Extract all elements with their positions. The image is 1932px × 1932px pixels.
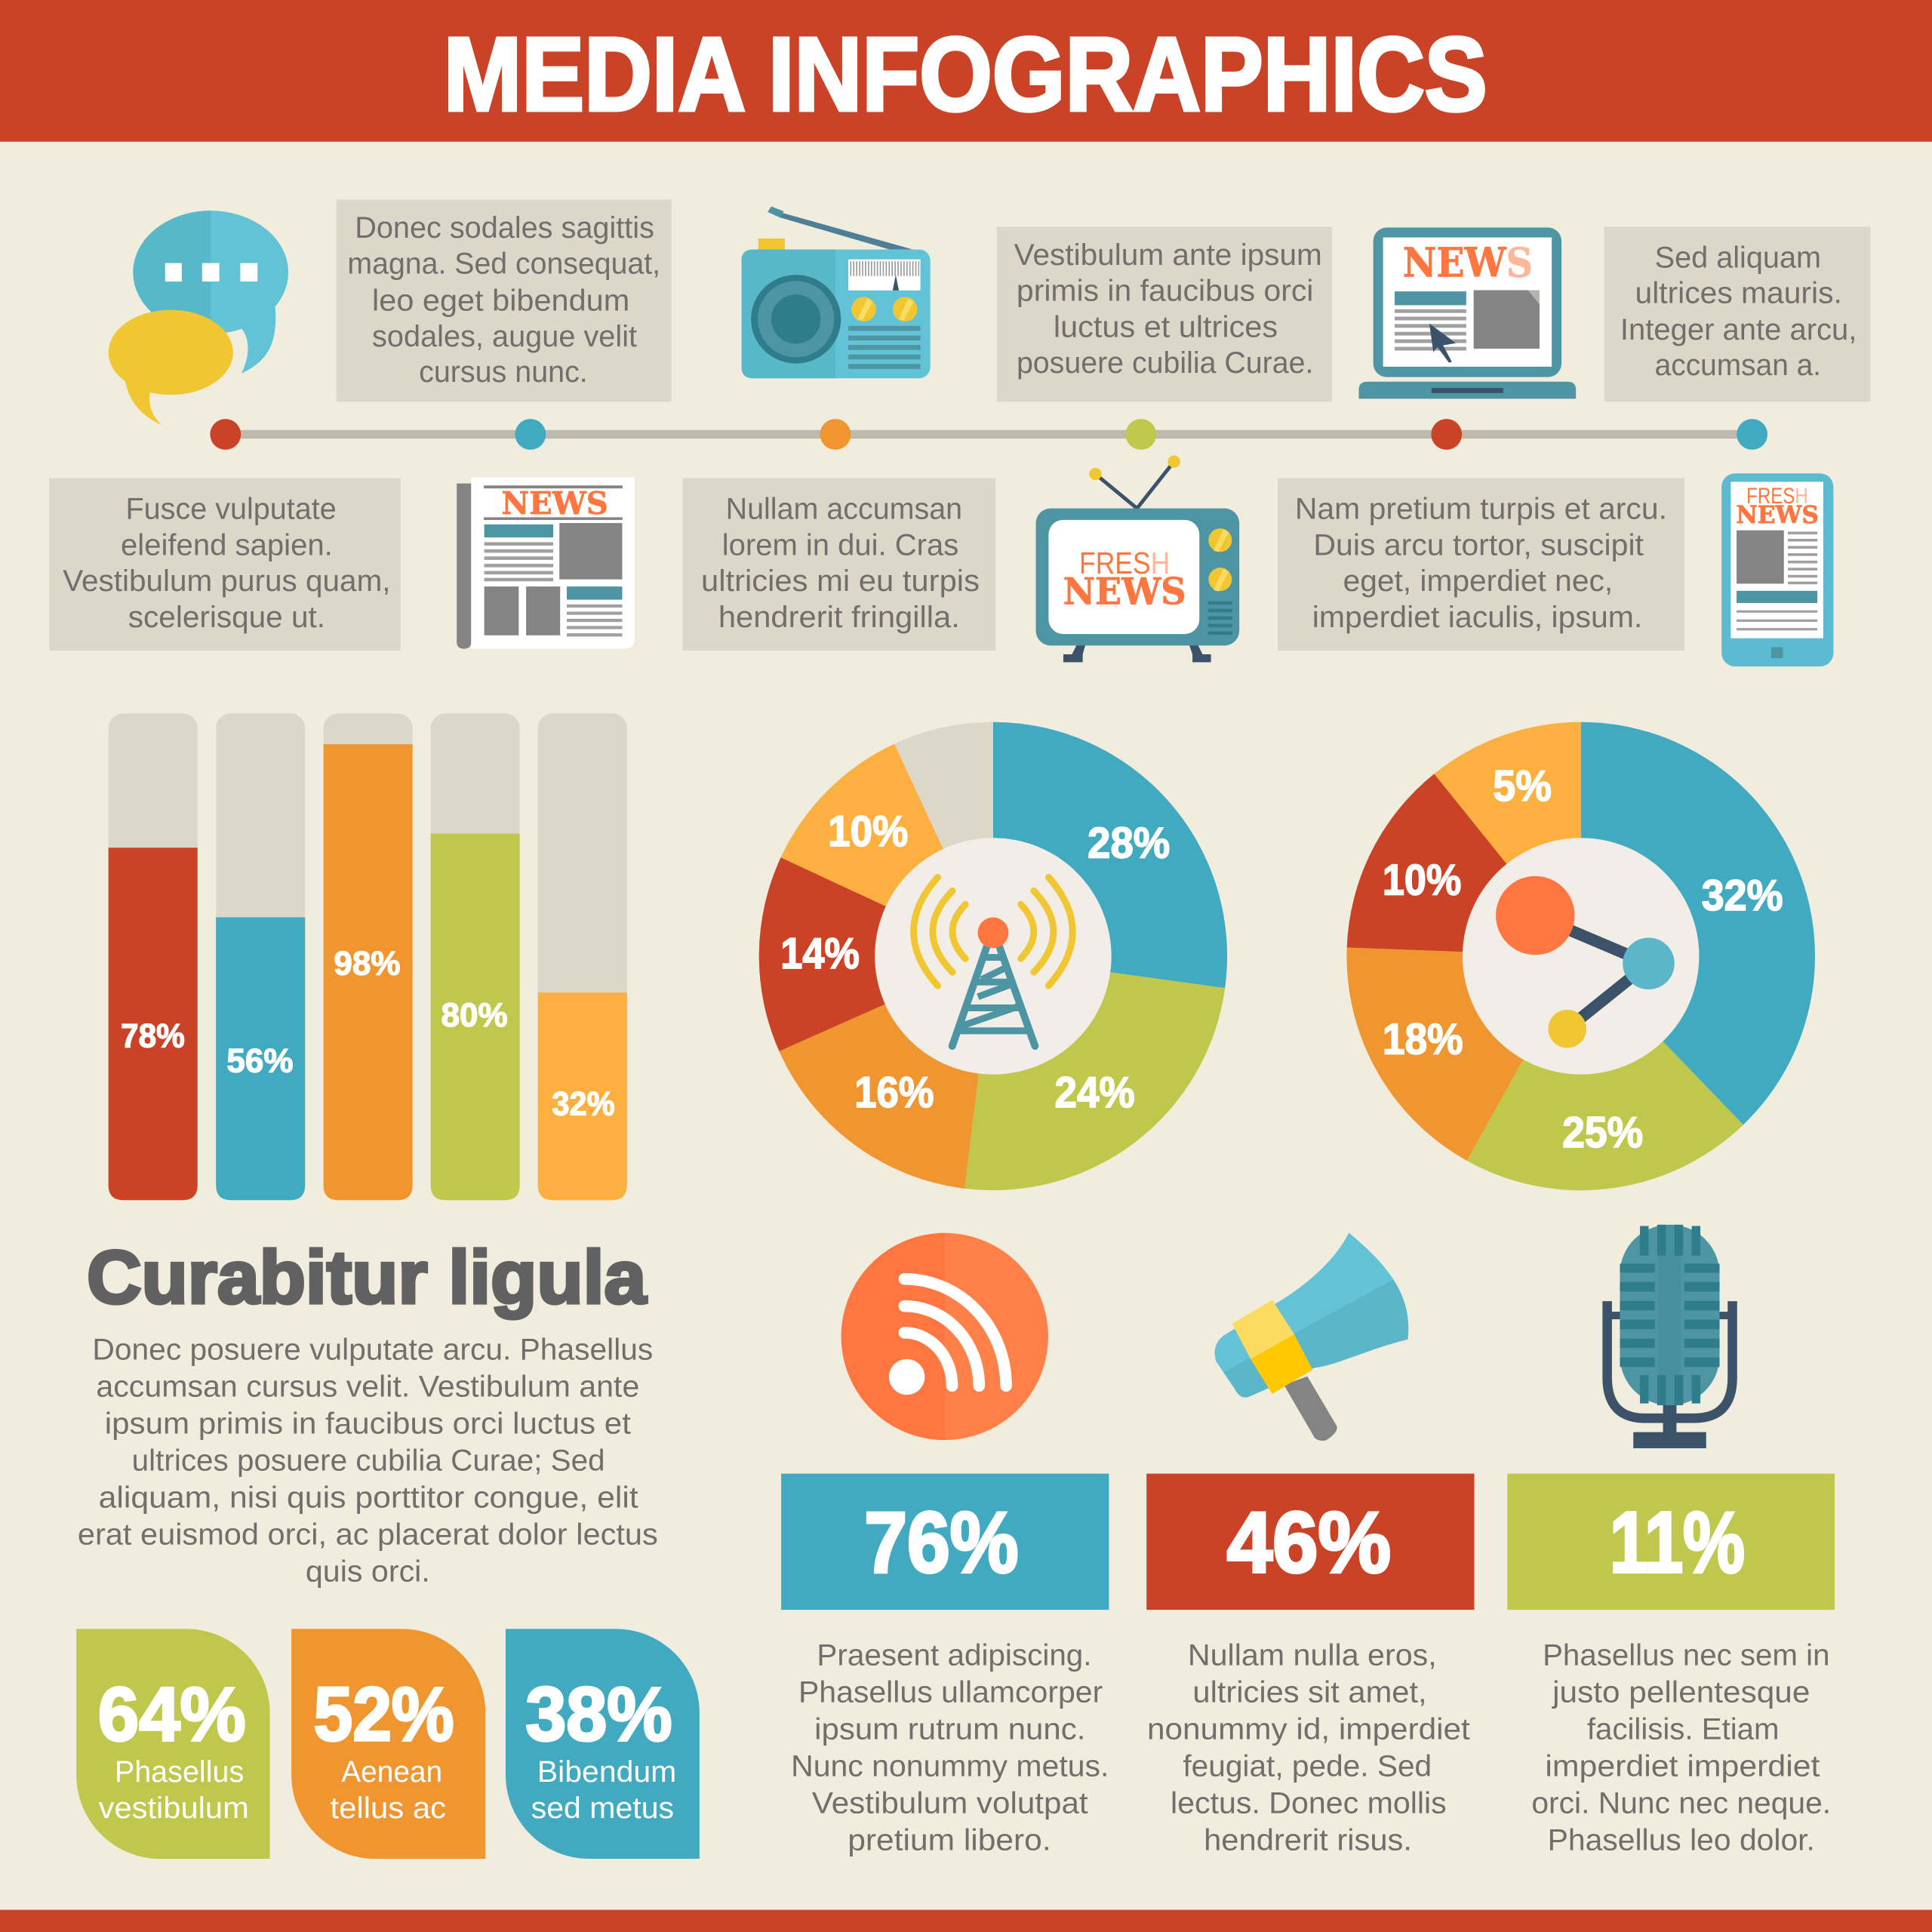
heading: Curabitur ligula: Curabitur ligula xyxy=(87,1236,648,1320)
text column 3: facilisis. Etiam xyxy=(1587,1712,1780,1746)
stat tab: 38%: Bibendum xyxy=(537,1755,676,1789)
donut chart 2: 5% xyxy=(1493,762,1552,811)
icon: television xyxy=(1036,455,1239,663)
text block: Vestibulum ante xyxy=(997,226,1332,401)
icon: tablet: FRESH xyxy=(1746,484,1808,509)
stat box: 11% xyxy=(1507,1474,1835,1610)
text block: Vestibulum ante: luctus et ultrices xyxy=(1054,311,1278,344)
bar 56%: 56% xyxy=(226,1042,294,1079)
paragraph: ipsum primis in faucibus orci luctus et xyxy=(105,1407,631,1441)
donut chart 2: 18% xyxy=(1383,1016,1463,1064)
bar 32% xyxy=(538,713,627,1200)
icon: RSS xyxy=(841,1233,1048,1440)
text column 3 xyxy=(1531,1639,1831,1857)
stat tab: 52%: Aenean xyxy=(341,1755,442,1789)
text column 1: Nunc nonummy metus. xyxy=(791,1749,1109,1783)
stat box: 46%: 46% xyxy=(1227,1495,1391,1591)
donut chart 1 xyxy=(759,722,1227,1190)
text column 2: lectus. Donec mollis xyxy=(1171,1786,1447,1820)
text block: Donec sodales: cursus nunc. xyxy=(419,355,588,389)
text block: Sed aliquam: ultrices mauris. xyxy=(1635,277,1842,310)
stat box: 46% xyxy=(1146,1474,1474,1610)
donut chart 1: 28% xyxy=(1088,819,1170,867)
text block: Fusce vulputate: Fusce vulputate xyxy=(126,492,337,525)
stat tab: 64% xyxy=(76,1629,270,1859)
paragraph: accumsan cursus velit. Vestibulum ante xyxy=(96,1371,639,1404)
icon: laptop xyxy=(1358,228,1576,398)
bar 98%: 98% xyxy=(334,945,401,982)
stat tab: 52% xyxy=(291,1629,485,1859)
text column 3: orci. Nunc nec neque. xyxy=(1531,1786,1831,1820)
icon: newspaper: NEWS xyxy=(501,485,608,521)
paragraph xyxy=(78,1334,658,1589)
text block: Nullam accumsan: hendrerit fringilla. xyxy=(718,601,960,634)
stat tab: 64%: 64% xyxy=(98,1672,246,1757)
text block: Nullam accumsan: Nullam accumsan xyxy=(726,492,962,525)
donut chart 1: 16% xyxy=(854,1069,934,1117)
text column 1: Vestibulum volutpat xyxy=(812,1786,1088,1820)
stat tab: 52%: 52% xyxy=(314,1672,454,1757)
text block: Donec sodales: sodales, augue velit xyxy=(372,320,637,353)
text block: Nullam accumsan xyxy=(682,478,995,651)
icon: share network xyxy=(1496,876,1675,1048)
text column 1 xyxy=(791,1639,1109,1857)
text block: Nam pretium: Nam pretium turpis et arcu. xyxy=(1295,492,1667,525)
text column 1: ipsum rutrum nunc. xyxy=(814,1712,1085,1746)
bar 80%: 80% xyxy=(441,997,508,1034)
stat box: 76% xyxy=(781,1474,1109,1610)
title: MEDIA INFOGRAPHICS xyxy=(444,16,1487,133)
text block: Donec sodales xyxy=(337,199,672,401)
stat tab: 64%: vestibulum xyxy=(99,1792,249,1825)
bar 78%: 78% xyxy=(121,1018,185,1055)
text block: Nam pretium: Duis arcu tortor, suscipit xyxy=(1313,529,1644,562)
bar chart xyxy=(109,713,627,1200)
icon: television: NEWS xyxy=(1063,569,1186,613)
text block: Fusce vulputate xyxy=(49,478,401,651)
text block: Vestibulum ante: posuere cubilia Curae. xyxy=(1017,346,1313,380)
text column 3: Phasellus nec sem in xyxy=(1543,1639,1829,1672)
text column 3: justo pellentesque xyxy=(1552,1676,1810,1709)
icon: tablet xyxy=(1721,473,1833,666)
text block: Fusce vulputate: Vestibulum purus quam, xyxy=(63,565,391,598)
text column 2: feugiat, pede. Sed xyxy=(1183,1749,1432,1783)
icon: tablet: NEWS xyxy=(1736,501,1819,529)
text column 3: Phasellus leo dolor. xyxy=(1548,1823,1815,1857)
stat tab: 38%: 38% xyxy=(525,1672,672,1757)
text block: Sed aliquam: accumsan a. xyxy=(1655,349,1821,382)
icon: laptop: NEWS xyxy=(1403,239,1533,287)
text block: Nullam accumsan: lorem in dui. Cras xyxy=(722,529,958,562)
text block: Sed aliquam: Sed aliquam xyxy=(1655,241,1821,274)
icon: newspaper xyxy=(457,477,635,649)
text block: Nam pretium xyxy=(1278,478,1684,651)
text column 2: ultricies sit amet, xyxy=(1192,1676,1427,1709)
header banner xyxy=(0,0,1932,142)
text column 2: nonummy id, imperdiet xyxy=(1147,1712,1470,1746)
bar 78% xyxy=(109,713,198,1200)
text column 2: hendrerit risus. xyxy=(1204,1823,1412,1857)
donut chart 1: 24% xyxy=(1055,1069,1135,1117)
timeline xyxy=(210,419,1767,450)
text block: Donec sodales: magna. Sed consequat, xyxy=(347,247,660,280)
icon: television: FRESH xyxy=(1079,546,1170,580)
donut chart 2 xyxy=(1346,722,1815,1190)
donut chart 1: 10% xyxy=(828,808,908,856)
text block: Donec sodales: leo eget bibendum xyxy=(372,284,629,317)
icon: microphone xyxy=(1607,1225,1733,1448)
paragraph: ultrices posuere cubilia Curae; Sed xyxy=(132,1444,605,1478)
stat tab: 38% xyxy=(506,1629,700,1859)
stat box: 76%: 76% xyxy=(864,1495,1018,1591)
bar 98% xyxy=(324,713,413,1200)
text block: Nullam accumsan: ultricies mi eu turpis xyxy=(701,565,980,598)
paragraph: erat euismod orci, ac placerat dolor lectus xyxy=(78,1518,658,1552)
text block: Donec sodales: Donec sodales sagittis xyxy=(355,211,654,245)
text block: Nam pretium: eget, imperdiet nec, xyxy=(1343,565,1613,598)
stat box: 11%: 11% xyxy=(1610,1495,1745,1591)
paragraph: Donec posuere vulputate arcu. Phasellus xyxy=(92,1334,653,1367)
text column 3: imperdiet imperdiet xyxy=(1545,1749,1820,1783)
donut chart 2: 25% xyxy=(1562,1109,1643,1157)
donut chart 2: 32% xyxy=(1702,872,1783,920)
text block: Sed aliquam: Integer ante arcu, xyxy=(1620,313,1857,346)
donut chart 2: 10% xyxy=(1383,856,1461,904)
text column 2 xyxy=(1147,1639,1470,1857)
footer band xyxy=(0,1910,1932,1932)
icon: broadcast tower xyxy=(914,877,1072,1046)
text column 1: Praesent adipiscing. xyxy=(817,1639,1092,1672)
text column 2: Nullam nulla eros, xyxy=(1188,1639,1437,1672)
text block: Vestibulum ante: primis in faucibus orci xyxy=(1017,274,1313,307)
text block: Fusce vulputate: eleifend sapien. xyxy=(121,529,333,562)
paragraph: quis orci. xyxy=(306,1555,430,1589)
bar 32%: 32% xyxy=(552,1086,615,1123)
text column 1: Phasellus ullamcorper xyxy=(798,1676,1103,1709)
paragraph: aliquam, nisi quis porttitor congue, elit xyxy=(99,1481,638,1515)
stat tab: 52%: tellus ac xyxy=(331,1792,446,1825)
stat tab: 38%: sed metus xyxy=(531,1792,674,1825)
bar 80% xyxy=(431,713,520,1200)
donut chart 1: 14% xyxy=(780,930,860,978)
icon: radio xyxy=(742,206,931,378)
stat tab: 64%: Phasellus xyxy=(115,1755,244,1789)
icon: megaphone xyxy=(1208,1232,1417,1441)
text block: Fusce vulputate: scelerisque ut. xyxy=(128,601,325,634)
text block: Vestibulum ante: Vestibulum ante ipsum xyxy=(1014,238,1322,272)
bar 56% xyxy=(216,713,305,1200)
text column 1: pretium libero. xyxy=(848,1823,1051,1857)
icon: speech bubbles xyxy=(109,211,288,425)
text block: Nam pretium: imperdiet iaculis, ipsum. xyxy=(1312,601,1642,634)
text block: Sed aliquam xyxy=(1604,226,1870,401)
